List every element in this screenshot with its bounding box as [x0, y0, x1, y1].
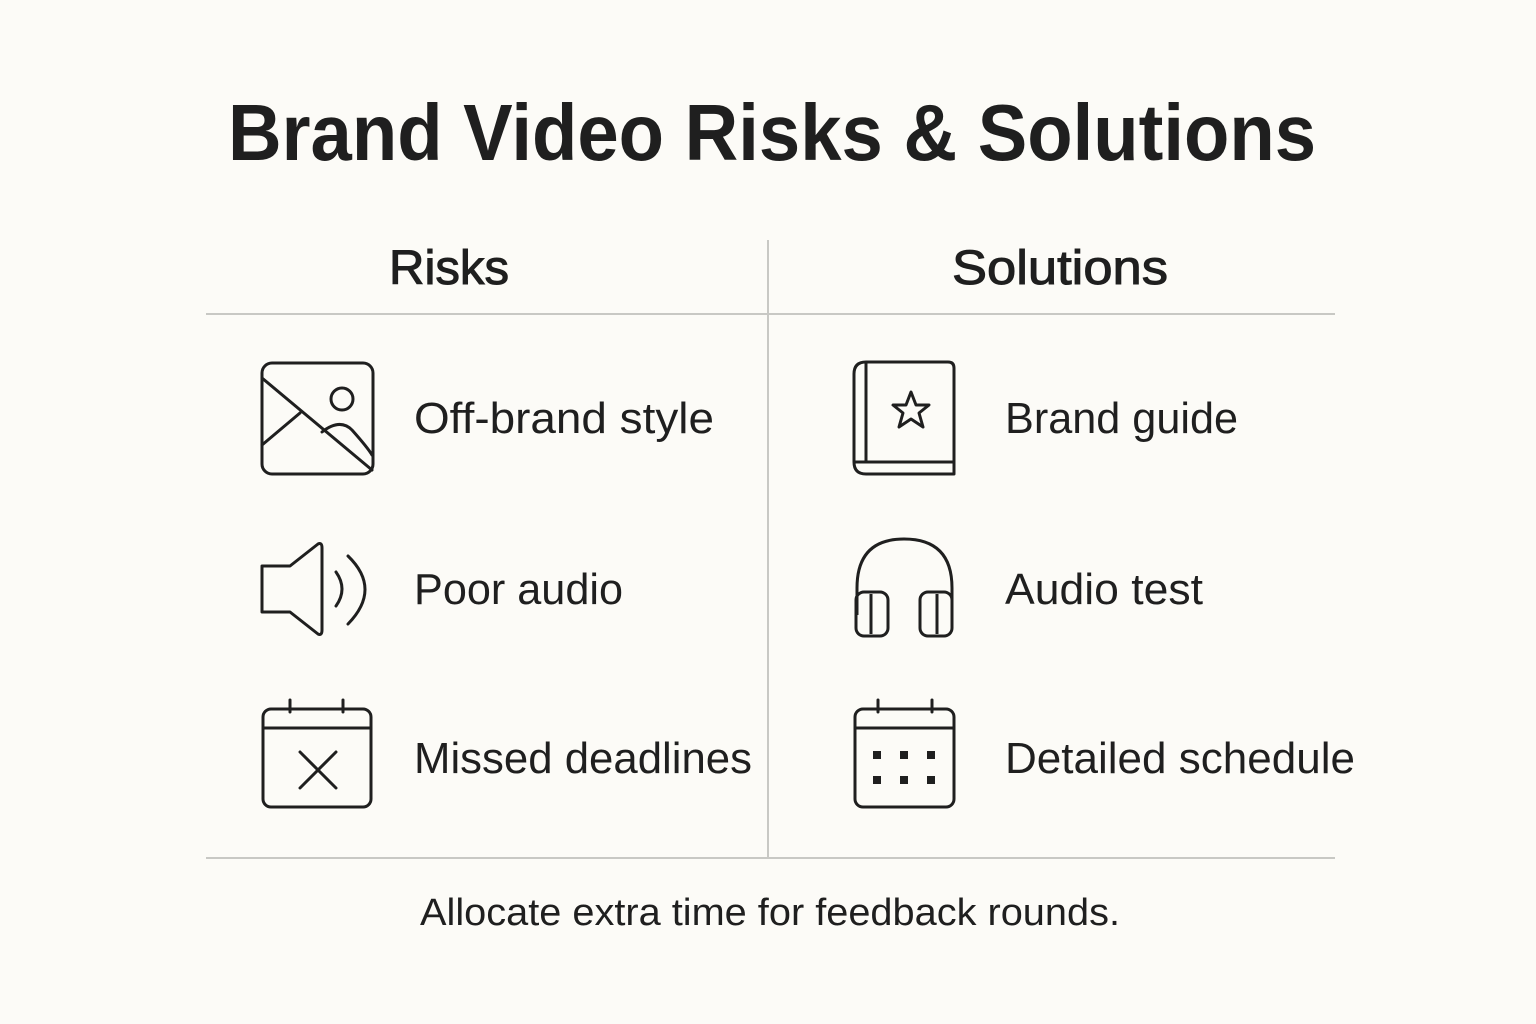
- icon: calendar with x: [263, 700, 371, 807]
- text: Poor audio: Poor audio: [414, 565, 623, 614]
- text: Brand guide: Brand guide: [1005, 394, 1238, 443]
- icon: book with star: [854, 362, 954, 474]
- text: Off-brand style: Off-brand style: [414, 394, 714, 443]
- icon: calendar with dots: [855, 700, 954, 807]
- heading: Risks: Risks: [389, 242, 509, 295]
- icon: speaker: [262, 544, 365, 634]
- icon: image: [262, 363, 373, 474]
- heading: Solutions: Solutions: [952, 242, 1168, 295]
- text: Missed deadlines: Missed deadlines: [414, 734, 752, 783]
- title: Brand Video Risks & Solutions: [228, 88, 1316, 177]
- footer note: Allocate extra time for feedback rounds.: [420, 892, 1120, 934]
- text: Audio test: Audio test: [1005, 565, 1203, 614]
- icon: headphones: [856, 539, 952, 636]
- text: Detailed schedule: Detailed schedule: [1005, 734, 1355, 783]
